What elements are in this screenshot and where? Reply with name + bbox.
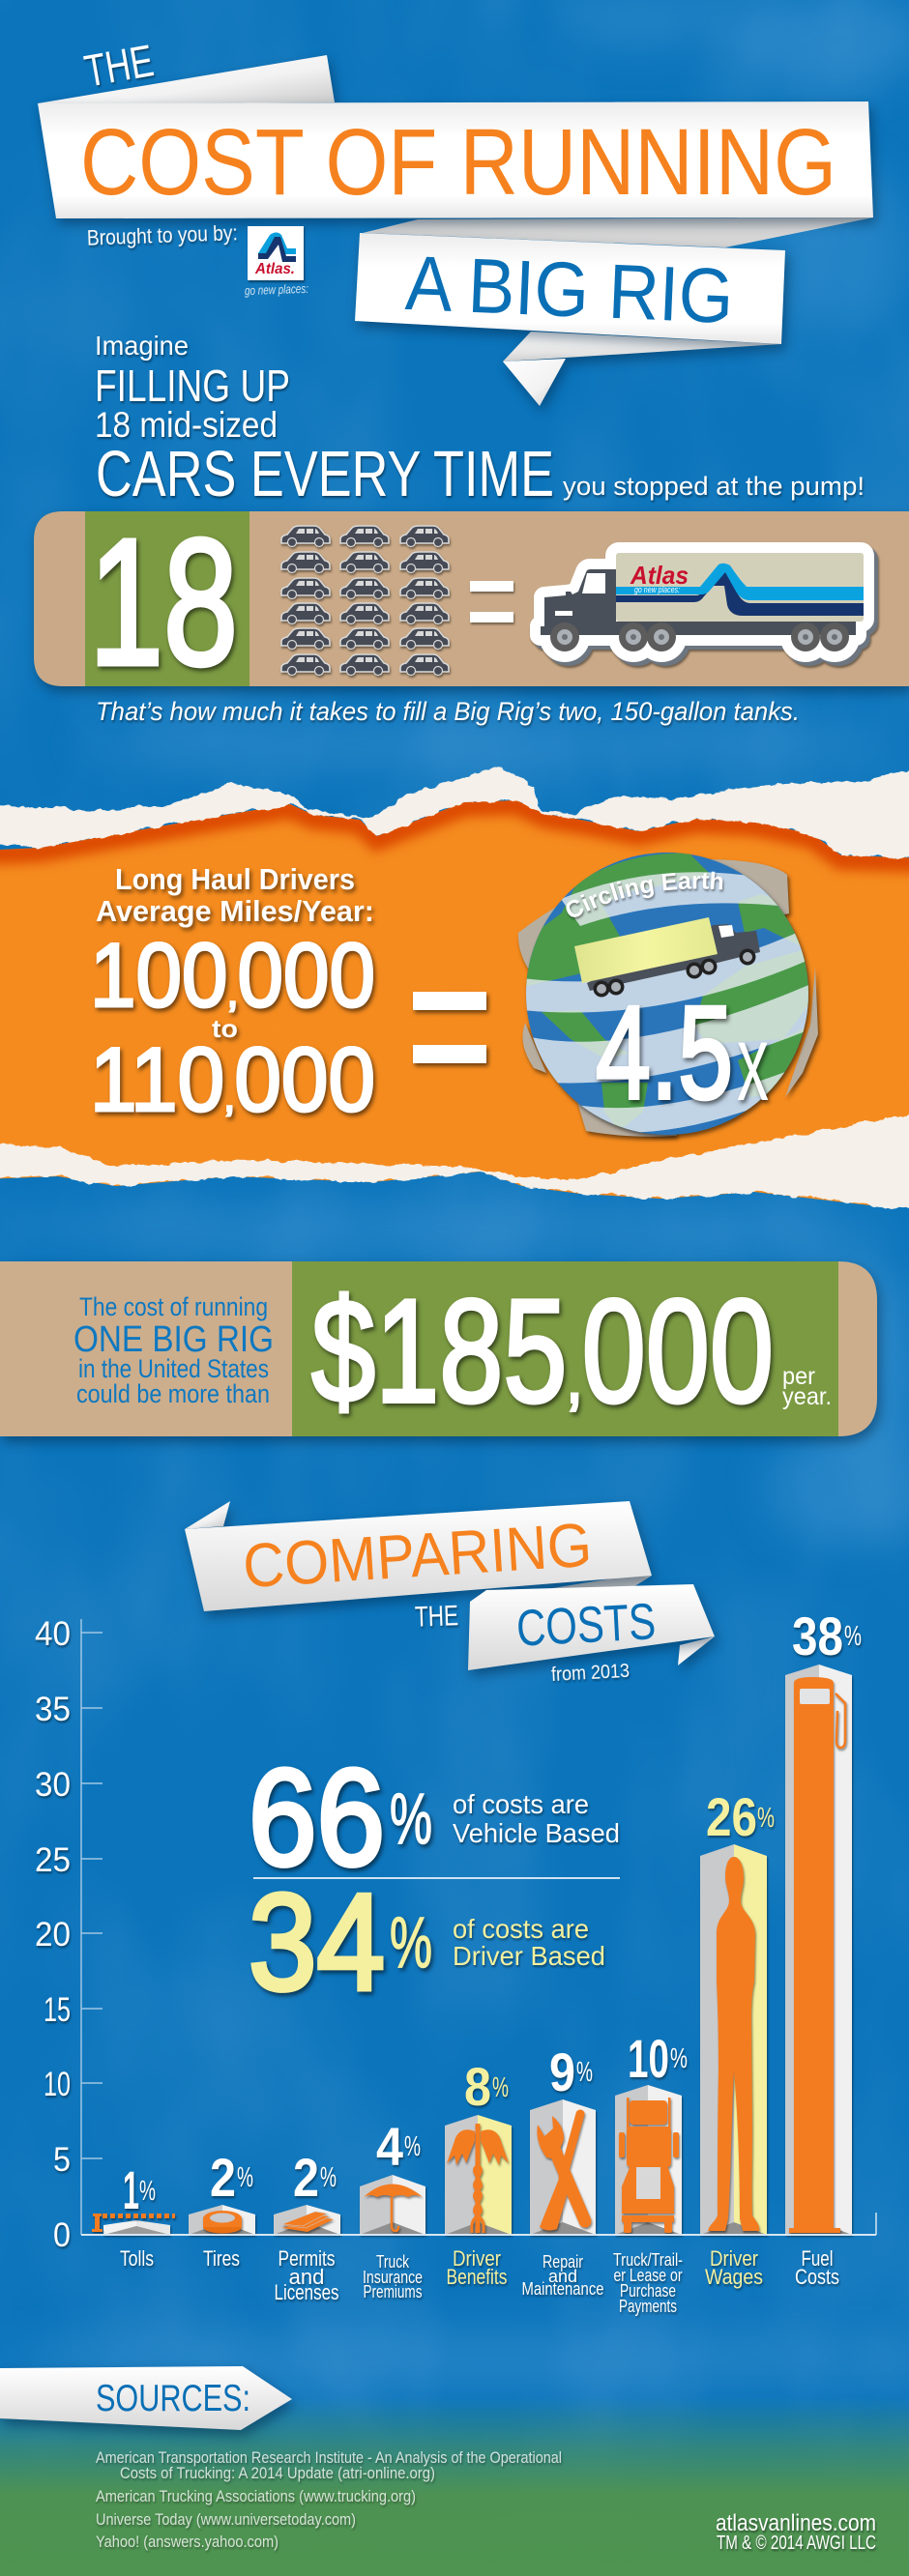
bar: truck insurance premiums: Insurance [363,2268,423,2287]
number: 110,000: 110,000 [90,1028,375,1130]
title ribbon [38,35,873,406]
y axis: 25 [35,1841,71,1879]
bar chart: cost breakdown [35,1606,876,2316]
bar: tolls: % [139,2176,156,2207]
y axis: 10 [44,2066,71,2103]
number: 100,000: 100,000 [90,924,375,1026]
text: vehicle based: Vehicle Based [453,1818,620,1848]
bar: repair and maintenance: % [576,2057,593,2088]
text: 18 mid-sized: 18 mid-sized [95,405,278,445]
bar: truck trailer lease or purchase [613,2028,688,2316]
intro text block [95,331,865,510]
bar: driver benefits: % [492,2072,509,2103]
footer credit: atlasvanlines.com [716,2510,876,2536]
text block: source list [96,2448,562,2551]
bar: driver benefits: Driver [453,2246,501,2271]
sources ribbon [0,2366,292,2430]
bar: truck insurance premiums: % [404,2131,421,2162]
comparing band [185,1501,652,1611]
costs band [468,1584,715,1670]
logo: Atlas [248,226,304,280]
number: 4.5x: 4.5 [596,979,733,1127]
bar: driver wages: % [757,1803,775,1834]
y axis: 15 [44,1991,71,2029]
panel: cost banner [0,1261,877,1436]
green banner block [292,1261,838,1436]
text block: source list: American Transportation Research Institute - An Analysis of the Operational [96,2448,562,2467]
icon: Atlas truck [541,553,867,655]
bar: tires [189,2147,255,2271]
main title ribbon band [38,101,873,218]
text: average miles per year: Average Miles/Year: [96,894,374,928]
bar: driver wages: 26 [706,1786,757,1847]
bar: truck trailer lease or purchase: Truck/Trail- [613,2250,683,2270]
y axis: 30 [35,1766,71,1804]
bar: tires: 2 [210,2147,236,2208]
bar: truck insurance premiums: 4 [376,2116,403,2177]
icon: globe wrapped by road [517,853,823,1143]
icon: truck on globe [574,917,760,998]
text: per year [782,1363,832,1410]
tan banner background [0,1261,877,1436]
bar: driver benefits: 8 [464,2056,491,2117]
y axis: 5 [53,2141,71,2179]
icon: Atlas truck: go new places: [634,585,680,594]
wrapping bands [517,872,822,1133]
icon: Atlas truck: Atlas [630,561,689,590]
bar: permits and licenses: % [320,2162,337,2193]
number: $185,000: $185,000 [311,1269,774,1433]
fold connector [470,1576,652,1605]
stat: 66 percent vehicle based: % [390,1779,432,1859]
tagline: go new places: go new places: [245,281,309,298]
word: THE: THE [81,35,157,97]
green number block [85,511,249,686]
heading ribbon: comparing the costs [185,1501,715,1686]
y axis: 20 [35,1916,71,1954]
bar: fuel costs: % [844,1621,862,1652]
bar: driver wages: Driver [710,2246,758,2271]
text: cost of running one big rig: ONE BIG RIG [73,1319,274,1360]
bar: tires: Tires [203,2246,240,2271]
heading: a big rig: A BIG RIG [404,240,735,339]
costs tail [678,1636,715,1665]
text: driver based: of costs are [453,1914,589,1944]
text block: source list: Costs of Trucking: A 2014 Update (atri-online.org) [120,2464,435,2482]
text: imagine: Imagine [95,331,189,361]
bar: repair and maintenance: Repair [542,2252,583,2272]
ribbon fold top-left [38,55,335,104]
text: driver based [453,1914,605,1971]
globe back wraps [518,859,818,1137]
logo: Atlas: Atlas. [254,261,295,277]
text: to: to [212,1014,238,1043]
ribbon tail upper [503,332,780,362]
bar: tolls: 1 [123,2159,139,2220]
number: 4.5x: x [737,1002,769,1123]
text: you stopped at the pump: you stopped at the pump! [563,472,865,501]
bar: permits and licenses: and [289,2265,324,2289]
bar: tolls: Tolls [120,2246,154,2271]
text block: source list: Yahoo! (answers.yahoo.com) [96,2533,279,2551]
footer credit [716,2510,876,2554]
bar: repair and maintenance: and [548,2267,577,2286]
stat: 34 percent driver based: % [390,1902,432,1983]
bar: truck trailer lease or purchase: Purchase [620,2281,676,2301]
word: the: THE [414,1600,459,1634]
text: cost of running one big rig: in the United States [78,1354,269,1383]
bar: permits and licenses: 2 [293,2147,319,2208]
text: filling up: FILLING UP [95,361,290,411]
sponsor credit [86,220,309,298]
bar: truck insurance premiums: Premiums [364,2282,422,2301]
bar: tires: % [237,2162,253,2193]
torn white edge top [0,764,909,858]
stat: 66 percent vehicle based: 66 [249,1741,385,1895]
text: cost of running one big rig [73,1292,274,1408]
text: from 2013: from 2013 [551,1661,630,1686]
text: cars every time: CARS EVERY TIME [96,438,554,510]
bar: driver wages: Wages [705,2265,763,2289]
text: per year: year. [782,1383,832,1410]
text: vehicle based [453,1789,620,1848]
sources ribbon: SOURCES: [96,2378,250,2419]
subtitle ribbon band [355,233,785,344]
bar: truck trailer lease or purchase: Payments [619,2297,677,2316]
text block: source list: Universe Today (www.universetoday.com) [96,2510,356,2529]
equals sign [413,992,486,1063]
text: driver based: Driver Based [453,1941,605,1971]
stat: 34 percent driver based: 34 [249,1866,385,2019]
globe ocean and land [517,851,822,1137]
bar: fuel costs [785,1606,862,2289]
text block: source list: American Trucking Associations (www.trucking.org) [96,2487,416,2505]
bar: repair and maintenance [522,2041,603,2299]
y axis [35,1615,103,2254]
bar: repair and maintenance: 9 [549,2041,575,2102]
panel: 18 cars equal one truck [34,503,909,703]
stat: 66 percent vehicle based [249,1741,620,1895]
bar: truck trailer lease or purchase: 10 [628,2028,669,2089]
bar: fuel costs: Fuel [801,2246,834,2271]
text: cost of running one big rig: The cost of running [79,1292,268,1321]
bar: repair and maintenance: Maintenance [522,2279,603,2299]
y axis: 0 [53,2216,71,2254]
equals sign [470,581,513,622]
panel: torn orange paper [0,767,909,1209]
y axis: 40 [35,1615,71,1653]
ribbon tail left [185,1501,230,1529]
icon: grid of 18 cars [281,526,449,675]
bar: driver benefits: Benefits [447,2265,507,2289]
text: vehicle based: of costs are [453,1789,589,1819]
text: brought to you by: Brought to you by: [86,220,238,250]
number: 18: 18 [89,503,238,703]
bar: truck insurance premiums [360,2116,425,2301]
bar: permits and licenses: Permits [279,2246,335,2271]
bar: permits and licenses: Licenses [275,2280,338,2304]
bar: driver wages [700,1786,775,2289]
text: per year: per [782,1363,815,1390]
bar: truck trailer lease or purchase: % [670,2043,688,2074]
text: cost of running one big rig: could be more than [76,1379,270,1408]
heading: costs: COSTS [515,1593,658,1658]
text: long haul drivers: Long Haul Drivers [115,862,355,896]
bar: fuel costs: Costs [795,2265,839,2289]
caption: tanks: That’s how much it takes to fill a Big Rig’s two, 150-gallon tanks. [96,697,800,726]
x axis [81,2213,876,2235]
bar: truck insurance premiums: Truck [376,2252,410,2272]
stat: 34 percent driver based [249,1866,605,2019]
bar: driver benefits [445,2056,512,2289]
bar: tolls [92,2159,175,2271]
bar: fuel costs: 38 [792,1606,843,1666]
ribbon fold under title [363,217,873,247]
torn white edge bottom [0,1112,909,1210]
ribbon tail lower [503,359,566,406]
tan panel background [34,511,909,686]
heading: comparing: COMPARING [241,1510,594,1601]
bar: truck trailer lease or purchase: er Lease or [613,2266,683,2285]
bar: permits and licenses [274,2147,340,2304]
y axis: 35 [35,1691,71,1728]
icon: globe wrapped by road: Circling Earth [566,872,725,920]
orange paper base [0,800,909,1207]
text: circling earth [571,888,759,920]
